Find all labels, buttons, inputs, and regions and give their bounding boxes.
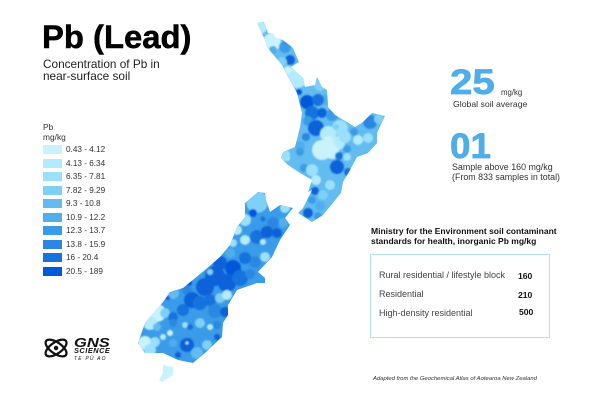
panel: standards [370,254,550,338]
legend item 7 [43,226,105,235]
legend: 9.3 - 10.8 [66,199,101,208]
row value: rural: 160 [518,271,532,281]
legend item 8 [43,240,105,249]
stewart island [159,365,173,382]
legend item 4 [43,186,105,195]
standards heading: Ministry for the Environment soil contaminant [371,226,557,236]
row value: high-density: 500 [519,307,533,317]
legend: 10.9 - 12.2 [66,213,105,222]
legend heading: Pb [43,122,53,132]
stat unit: mg/kg [501,88,522,97]
legend item 3 [43,172,105,181]
legend: 7.82 - 9.29 [66,186,105,195]
legend item 1 [43,145,105,154]
legend [43,122,105,276]
north island [257,22,385,222]
stat caption: Global soil average [453,99,527,109]
logo: GNS Science [44,335,110,362]
stat number 01: 01 [450,127,491,166]
legend: 16 - 20.4 [66,253,98,262]
subtitle: near-surface soil [43,69,130,83]
subtitle [43,57,160,83]
legend: 12.3 - 13.7 [66,226,105,235]
title: Pb (Lead) [42,18,191,55]
map: New Zealand lead concentration [138,22,385,382]
source note: Adapted from the Geochemical Atlas of Aotearoa New Zealand [373,376,537,382]
legend: 6.35 - 7.81 [66,172,105,181]
row label: residential: Residential [379,289,424,299]
logo wordmark: GNS [74,335,110,350]
stat: global soil average [450,63,527,109]
legend: 13.8 - 15.9 [66,240,105,249]
stat: samples above threshold [450,127,560,182]
legend item 6 [43,213,105,222]
subtitle: Concentration of Pb in [43,57,160,71]
legend heading: mg/kg [43,132,66,142]
legend: 0.43 - 4.12 [66,145,105,154]
stat caption: Sample above 160 mg/kg [452,162,553,172]
row label: high-density: High-density residential [379,308,473,318]
stat caption: (From 833 samples in total) [452,172,560,182]
icon: atom swirl [44,338,68,358]
legend item 10 [43,267,103,276]
row label: rural: Rural residential / lifestyle block [379,270,505,280]
south island [138,192,293,363]
stat caption [452,162,560,182]
logo te pu ao: TE PŪ AO [74,356,107,362]
legend: 4.13 - 6.34 [66,159,105,168]
row value: residential: 210 [518,290,532,300]
legend item 5 [43,199,101,208]
standards heading [371,226,557,246]
legend item 2 [43,159,105,168]
legend item 9 [43,253,98,262]
legend: 20.5 - 189 [66,267,103,276]
logo science: SCIENCE [74,348,110,355]
legend heading [43,122,66,142]
stat number 25: 25 [450,63,495,102]
standards heading: standards for health, inorganic Pb mg/kg [371,236,536,246]
